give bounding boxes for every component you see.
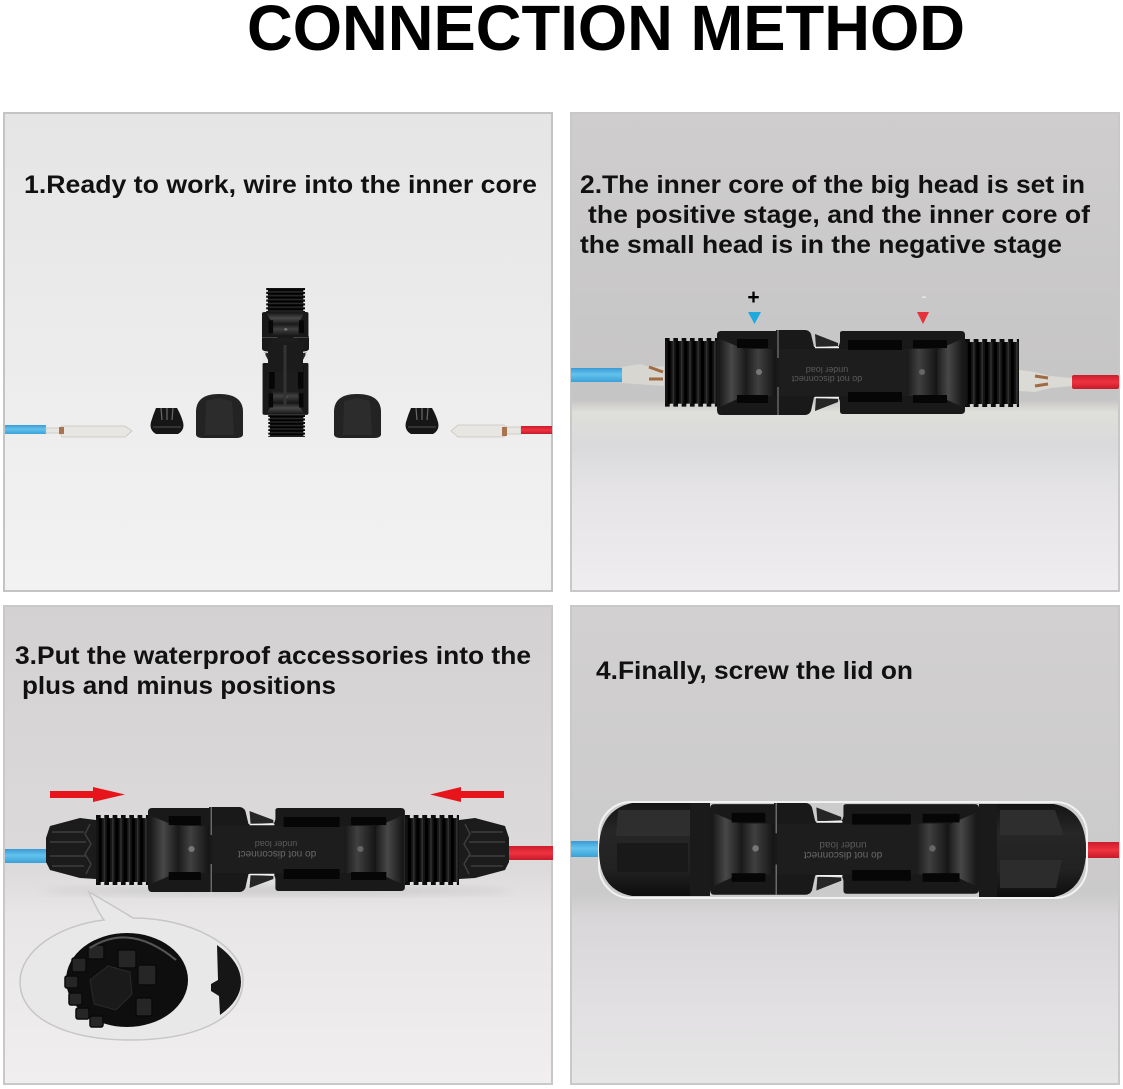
panel 3: waterproof accessories: [4, 606, 553, 1084]
arrow left: [430, 787, 504, 802]
connector assembled without caps: [665, 330, 1019, 415]
step 3 caption: plus and minus positions: [22, 672, 336, 700]
step 2 caption: [580, 171, 1091, 259]
connector assembled without caps: do not disconnect: [791, 374, 862, 384]
blue wire: [5, 849, 47, 863]
blue wire with pin: [5, 425, 132, 437]
panel 4: lid screwed on: [571, 606, 1119, 1084]
blue wire and crimp: [571, 364, 664, 386]
connector with waterproof seals: do not disconnect: [238, 848, 316, 859]
step 4 caption: 4.Finally, screw the lid on: [596, 657, 913, 685]
step 3 caption: [15, 642, 531, 700]
red wire with pin: [451, 425, 552, 437]
cap left: [196, 394, 243, 438]
red wire: [509, 846, 553, 860]
arrow right: [50, 787, 125, 802]
red wire: [1085, 842, 1119, 858]
connector with lids: under load: [819, 839, 867, 850]
connector with waterproof seals: under load: [255, 839, 297, 849]
panel 2: inner cores in positive and negative stage: [571, 113, 1119, 591]
connector assembled without caps: under load: [806, 365, 848, 375]
rubber seal left: [151, 408, 183, 434]
rubber seal right: [406, 408, 438, 434]
cap right: [334, 394, 381, 438]
red wire and crimp: [1019, 370, 1119, 392]
minus sign: -: [922, 288, 927, 304]
callout with seal close-up: [20, 892, 243, 1040]
connector with waterproof seals: [42, 807, 512, 894]
plus sign: +: [747, 286, 760, 309]
vertical connector: [262, 288, 309, 437]
panel 1: parts ready to wire: [4, 113, 552, 591]
step 2 caption: the small head is in the negative stage: [580, 231, 1062, 259]
connector with lids: do not disconnect: [804, 849, 882, 860]
step 3 caption: 3.Put the waterproof accessories into the: [15, 642, 531, 670]
blue marker: [748, 312, 761, 324]
red marker: [917, 312, 929, 324]
step 2 caption: 2.The inner core of the big head is set in: [580, 171, 1085, 199]
connector with lids: [599, 802, 1087, 898]
step 1 caption: 1.Ready to work, wire into the inner core: [24, 171, 537, 199]
step 2 caption: the positive stage, and the inner core of: [588, 201, 1091, 229]
blue wire: [571, 841, 601, 857]
